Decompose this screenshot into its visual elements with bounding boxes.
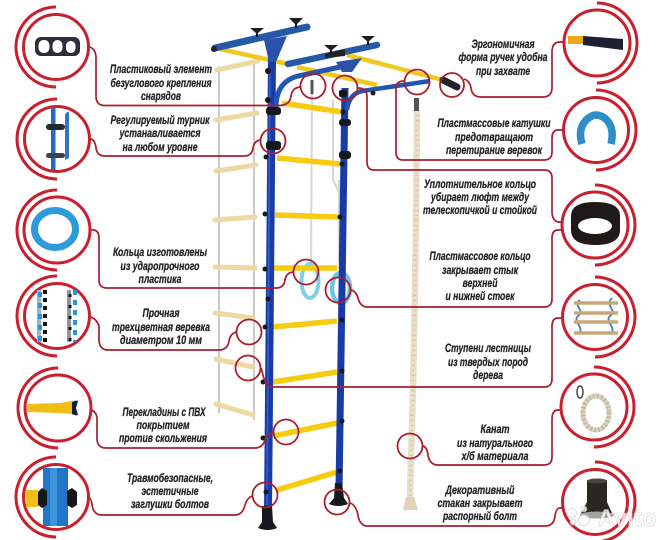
connector lines [88, 42, 565, 526]
text: decorative cup: Декоративный [445, 485, 514, 497]
top cups [250, 18, 375, 54]
text: bolt caps [127, 473, 213, 511]
text: three-colour rope: диаметром 10 мм [120, 335, 202, 347]
climbing rope [403, 98, 419, 510]
text: rings: Кольца изготовлены [113, 247, 207, 259]
text: ladder rungs: дерева [473, 370, 503, 382]
text: bolt caps: заглушки болтов [131, 499, 209, 511]
icon: rope coil [577, 386, 609, 430]
text: natural rope: Канат [480, 424, 510, 436]
text: plastic mount: снарядов [141, 91, 181, 103]
watermark [568, 505, 657, 532]
callout: crossbar [18, 368, 91, 448]
text: spools: предотвращают [455, 132, 533, 144]
text: rings: пластика [138, 274, 182, 286]
posts and arms [211, 27, 430, 510]
icon: grip handle [568, 36, 623, 50]
icon: wooden ladder [574, 298, 618, 334]
text: rings: из ударопрочного [120, 261, 200, 273]
handle [443, 80, 457, 87]
black bolts [260, 68, 376, 494]
icon: post with caps [26, 468, 77, 526]
pointer circles on frame [236, 70, 464, 514]
gymnastic ropes and rings [302, 80, 350, 303]
text: handle [458, 39, 548, 78]
text: ladder rungs [445, 343, 531, 382]
text: crossbar: покрытием [136, 420, 190, 432]
text: adjustable bar: на любом уровне [122, 142, 198, 154]
callout: ladder rungs [562, 277, 635, 357]
text: decorative cup [438, 485, 522, 523]
text: natural rope [457, 424, 533, 463]
icon: rope strands [39, 290, 75, 342]
text: adjustable bar: устанавливается [119, 128, 201, 140]
text: sealing ring [423, 179, 537, 217]
text: decorative cup: стакан закрывает [438, 498, 522, 510]
icon: plastic mount plate [35, 37, 80, 56]
callout: handle [564, 3, 637, 83]
callout: adjustable bar [17, 99, 90, 179]
text: joint ring [430, 251, 530, 303]
wall bars frame [211, 18, 457, 530]
text: handle: Эргономичная [472, 39, 535, 51]
text: joint ring: Пластмассовое кольцо [430, 251, 530, 263]
yellow top bars [220, 49, 443, 85]
yellow rungs [273, 103, 342, 490]
text: adjustable bar [110, 115, 210, 154]
text: adjustable bar: Регулируемый турник [110, 115, 210, 127]
callout: plastic mount [16, 7, 88, 87]
text: three-colour rope: Прочная [142, 308, 180, 320]
text: crossbar: Перекладины с ПВХ [122, 407, 206, 419]
text: spools [438, 118, 550, 157]
callout: rings [17, 190, 90, 270]
text: joint ring: закрывает стык [442, 265, 519, 277]
wooden rope ladder [215, 61, 258, 420]
text: crossbar [119, 407, 207, 445]
icon: blue C clip [581, 115, 612, 144]
callout: natural rope [561, 367, 634, 447]
icon: blue ring [34, 210, 76, 248]
text: handle: форма ручек удобна [458, 52, 548, 64]
callout: sealing ring [562, 185, 635, 265]
icon: adjustable bar [46, 107, 69, 170]
text: spools: перетирание веревок [446, 145, 543, 157]
foot cups [258, 483, 348, 530]
text: sealing ring: убирает люфт между [430, 192, 529, 204]
text: spools: Пластмассовые катушки [438, 118, 550, 130]
callout: plastic spools [564, 90, 636, 170]
text: ladder rungs: Ступени лестницы [445, 343, 531, 355]
text: decorative cup: распорный болт [442, 511, 517, 523]
text: bolt caps: Травмобезопасные, [127, 473, 213, 485]
icon: black ring [571, 202, 620, 245]
text: natural rope: х/б материала [461, 451, 529, 463]
text: ladder rungs: из твердых пород [448, 357, 528, 369]
text: joint ring: и нижней стоек [446, 291, 515, 303]
text: plastic mount: безуглового крепления [110, 78, 212, 90]
text: bolt caps: эстетичные [142, 486, 199, 498]
text: rings [113, 247, 207, 286]
text: crossbar: против скольжения [119, 433, 207, 445]
text: plastic mount: Пластиковый элемент [110, 64, 212, 76]
text: three-colour rope [112, 308, 210, 347]
text: handle: при захвате [476, 66, 530, 78]
callout: three-colour rope [17, 276, 90, 356]
callout: bolt caps [16, 457, 88, 537]
text: plastic mount [110, 64, 212, 103]
callout: decorative cup [562, 462, 635, 540]
icon: yellow crossbar [27, 401, 78, 415]
text: sealing ring: телескопичкой и стойкой [423, 205, 537, 217]
watermark: Avito [597, 505, 657, 532]
text: joint ring: верхней [462, 278, 498, 290]
text: natural rope: из натурального [457, 438, 533, 450]
icon: floor cup [580, 478, 614, 518]
text: sealing ring: Уплотнительное кольцо [424, 179, 536, 191]
text: three-colour rope: трехцветная веревка [112, 322, 210, 334]
